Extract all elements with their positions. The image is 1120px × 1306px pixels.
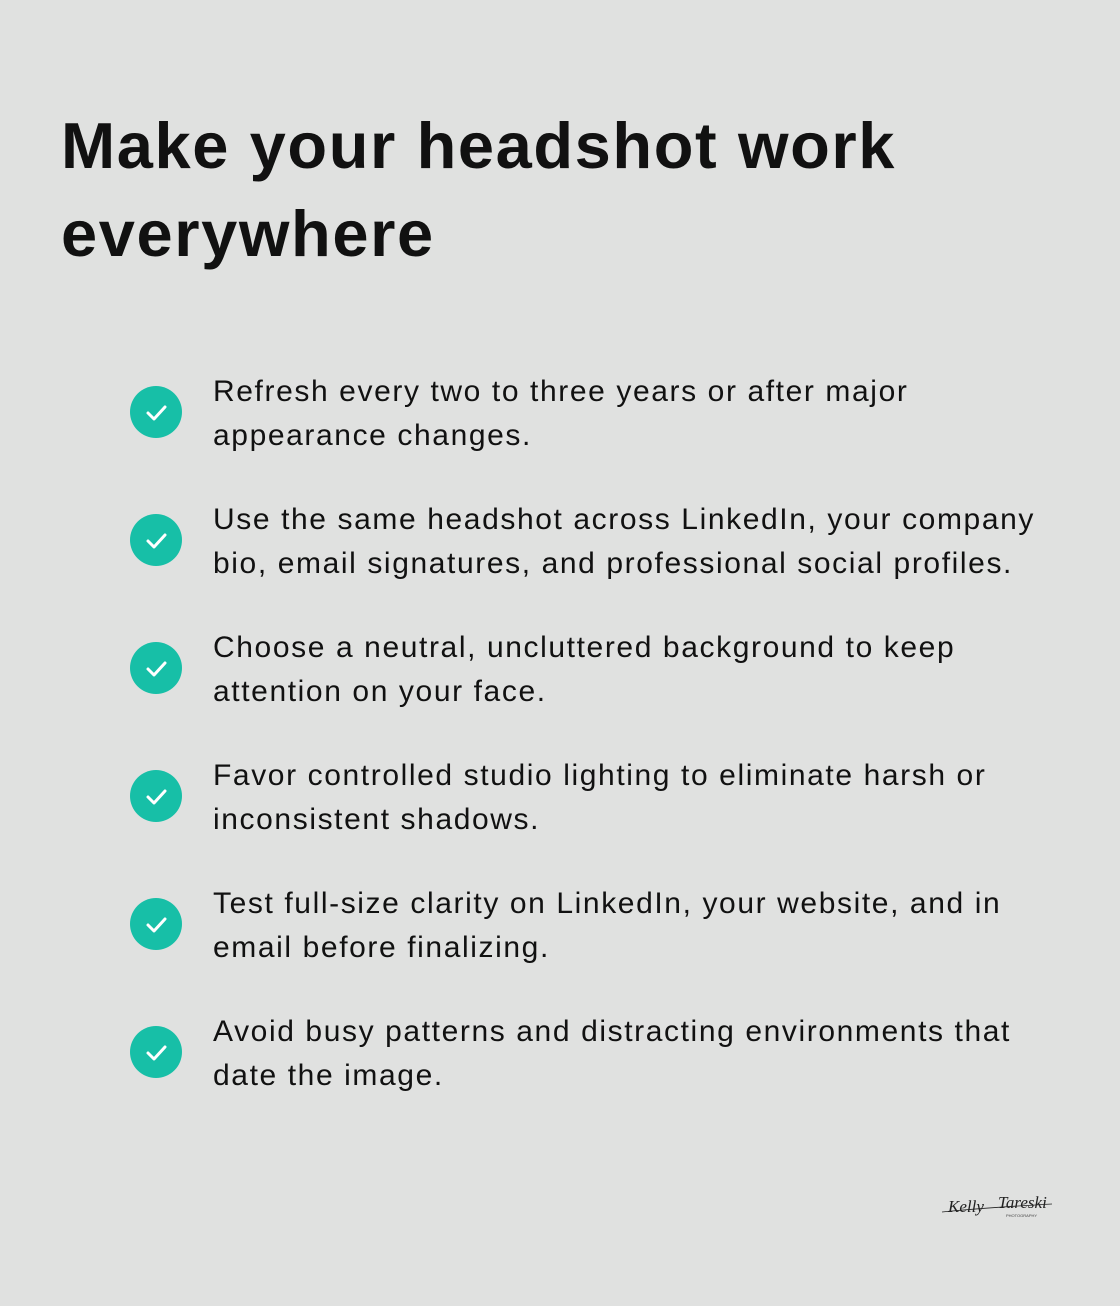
- item 2: bio, email signatures, and professional social profiles.: [213, 547, 1013, 580]
- item 2: Use the same headshot across LinkedIn, your company: [213, 503, 1035, 536]
- item 6: [130, 1015, 1011, 1092]
- icon: check: [130, 898, 182, 950]
- title: [61, 109, 896, 270]
- logo signature: [942, 1193, 1052, 1218]
- icon: check: [130, 770, 182, 822]
- item 2: [130, 503, 1035, 580]
- item 1: appearance changes.: [213, 419, 532, 452]
- icon: check: [130, 1026, 182, 1078]
- item 4: [130, 759, 986, 836]
- logo signature: PHOTOGRAPHY: [1006, 1213, 1037, 1218]
- item 1: Refresh every two to three years or after major: [213, 375, 908, 408]
- item 1: [130, 375, 908, 452]
- item 4: Favor controlled studio lighting to eliminate harsh or: [213, 759, 986, 792]
- item 3: Choose a neutral, uncluttered background to keep: [213, 631, 955, 664]
- title: everywhere: [61, 197, 435, 270]
- item 6: date the image.: [213, 1059, 444, 1092]
- item 3: attention on your face.: [213, 675, 547, 708]
- icon: check: [130, 642, 182, 694]
- icon: check: [130, 386, 182, 438]
- title: Make your headshot work: [61, 109, 896, 182]
- item 3: [130, 631, 955, 708]
- item 6: Avoid busy patterns and distracting environments that: [213, 1015, 1011, 1048]
- item 4: inconsistent shadows.: [213, 803, 540, 836]
- item 5: email before finalizing.: [213, 931, 550, 964]
- item 5: [130, 887, 1001, 964]
- logo signature: Kelly: [947, 1197, 984, 1216]
- logo signature: Tareski: [998, 1193, 1047, 1212]
- icon: check: [130, 514, 182, 566]
- item 5: Test full-size clarity on LinkedIn, your website, and in: [213, 887, 1001, 920]
